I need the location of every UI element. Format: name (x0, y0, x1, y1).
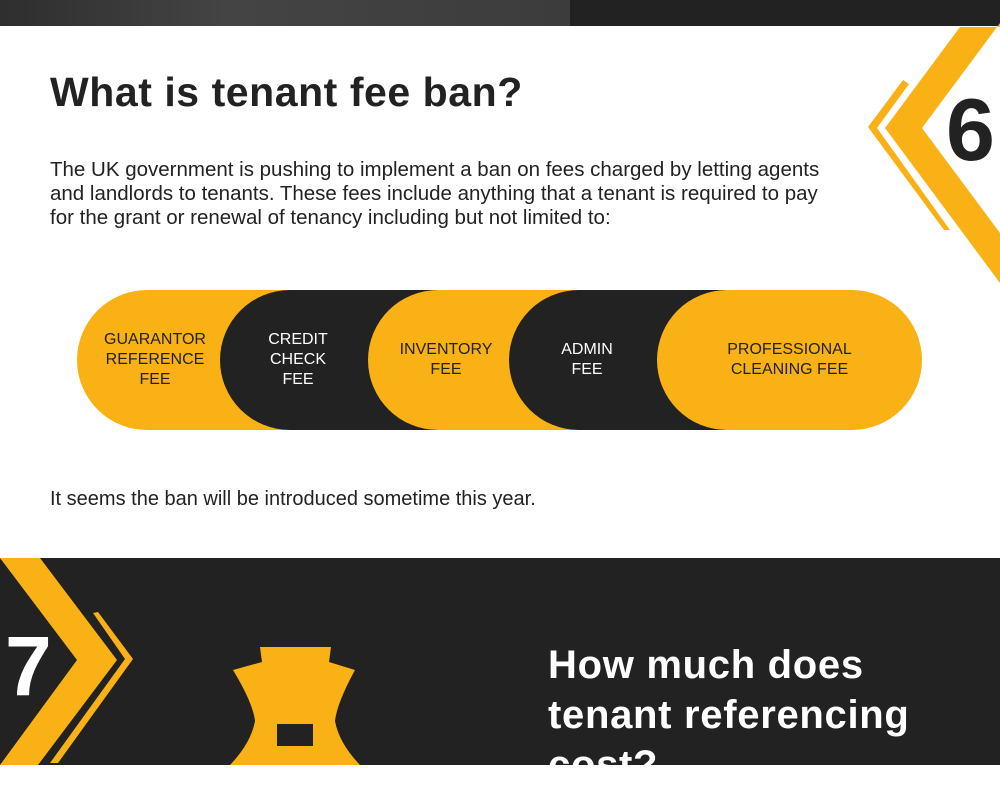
pill: guarantor reference fee: FEE (139, 371, 171, 388)
icon: money bag (230, 647, 360, 765)
pill: guarantor reference fee: REFERENCE (106, 351, 204, 368)
pill: credit check fee: FEE (282, 371, 314, 388)
heading: how much does tenant referencing cost: cost? (548, 743, 658, 787)
pill: admin fee: ADMIN (561, 341, 613, 358)
heading: how much does tenant referencing cost: tenant referencing (548, 693, 910, 737)
title: What is tenant fee ban? (50, 69, 523, 115)
pill: inventory fee: INVENTORY (400, 341, 492, 358)
pill: inventory fee: FEE (430, 361, 462, 378)
pill: professional cleaning fee: PROFESSIONAL (727, 341, 852, 358)
intro paragraph (50, 158, 819, 229)
pill: admin fee (509, 290, 809, 430)
dark section 7 (0, 558, 1000, 765)
intro paragraph: for the grant or renewal of tenancy including but not limited to: (50, 206, 611, 229)
pill: credit check fee (220, 290, 520, 430)
closing note: It seems the ban will be introduced sometime this year. (50, 488, 536, 510)
pill: professional cleaning fee (657, 290, 922, 430)
chevron with number 6: 6 (946, 80, 995, 179)
pill: admin fee: FEE (571, 361, 603, 378)
heading: how much does tenant referencing cost (548, 643, 910, 787)
chevron with number 7 (0, 558, 133, 765)
heading: how much does tenant referencing cost: How much does (548, 643, 864, 687)
top banner strip (0, 0, 1000, 26)
pill: inventory fee (368, 290, 668, 430)
intro paragraph: and landlords to tenants. These fees include anything that a tenant is required to pay (50, 182, 818, 205)
intro paragraph: The UK government is pushing to implement a ban on fees charged by letting agents (50, 158, 819, 181)
pill: guarantor reference fee: GUARANTOR (104, 331, 206, 348)
pill: professional cleaning fee: CLEANING FEE (731, 361, 848, 378)
chevron with number 7: 7 (5, 619, 52, 713)
pill: credit check fee: CREDIT (268, 331, 328, 348)
pill: credit check fee: CHECK (270, 351, 326, 368)
pill: guarantor reference fee (77, 290, 377, 430)
